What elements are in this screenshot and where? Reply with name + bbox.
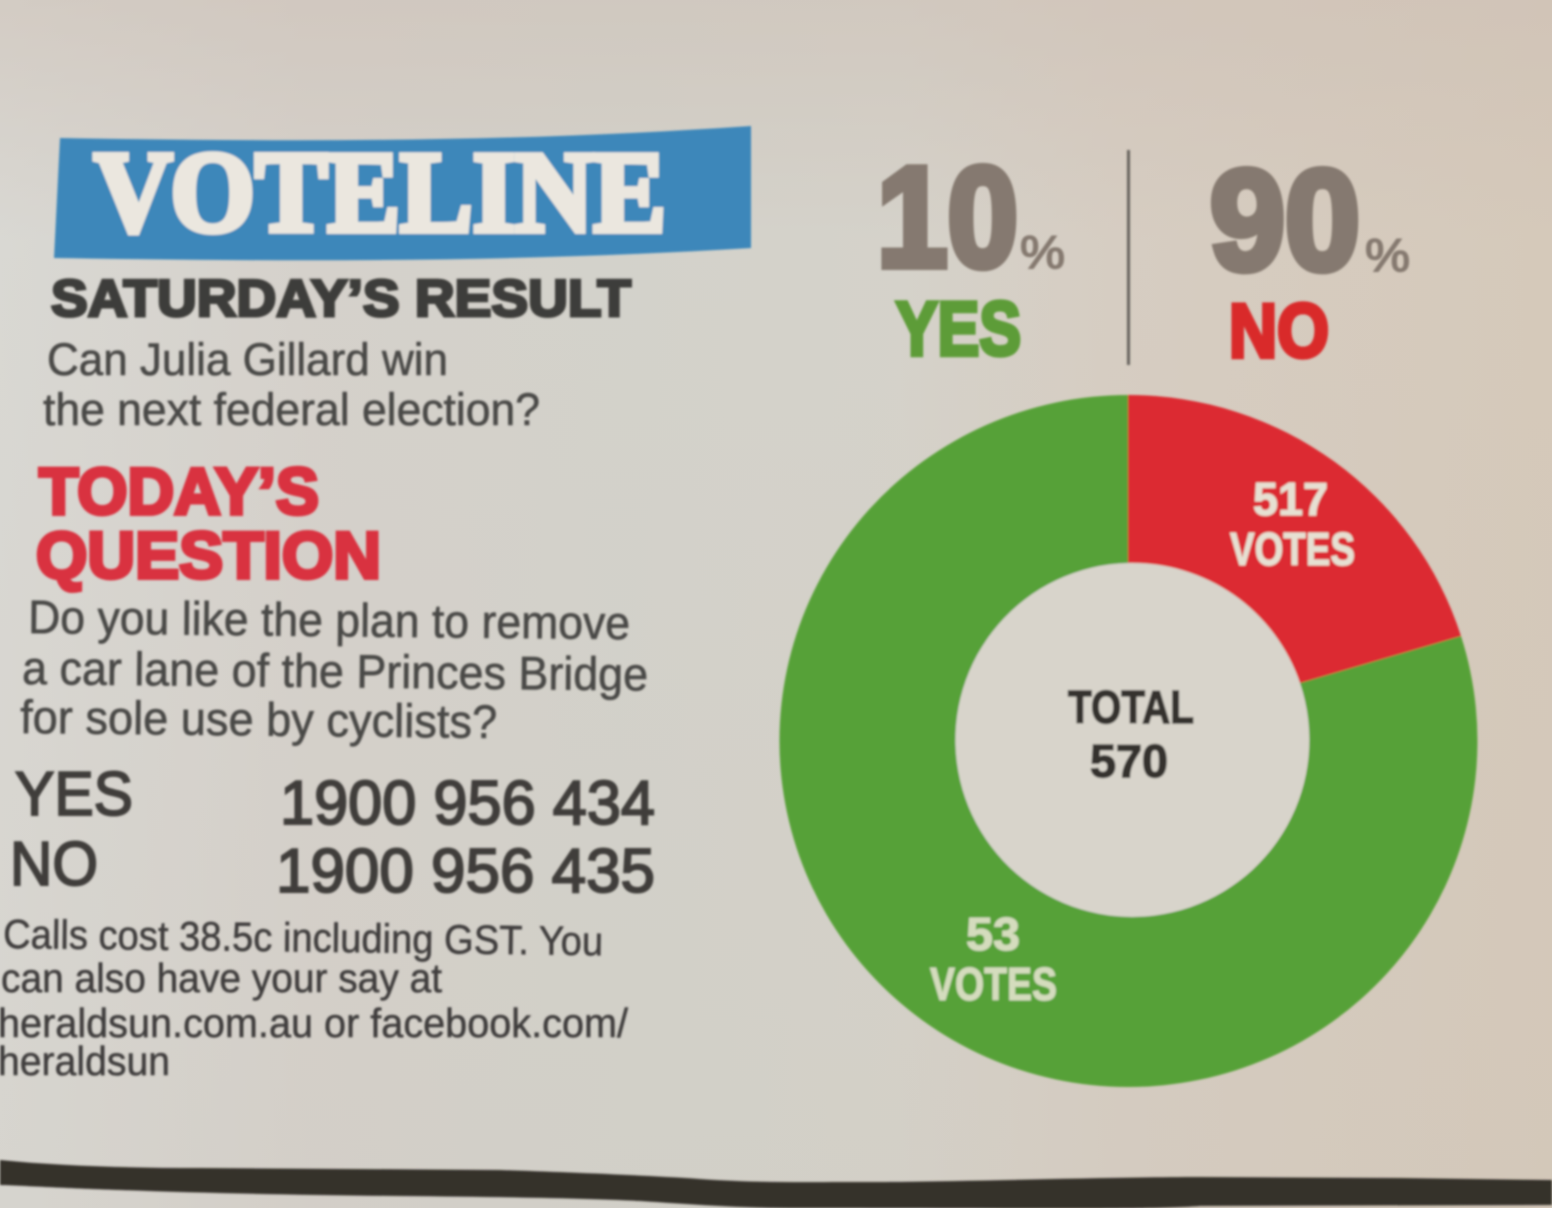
text: today's question body: Do you like the plan to remove — [28, 590, 630, 649]
result: 10 percent yes — [877, 138, 1065, 372]
result: 90 percent no: 90 — [1210, 141, 1360, 300]
text: call cost note: can also have your say at — [1, 955, 443, 1001]
donut chart — [779, 395, 1477, 1087]
vote options and phone numbers: YES — [15, 760, 133, 829]
label: 517 votes — [1230, 473, 1355, 575]
label: 53 votes — [930, 908, 1057, 1010]
panel: voteline text column — [0, 126, 751, 1084]
vote options and phone numbers: 1900 956 435 — [276, 837, 655, 906]
heading: Today's question: TODAY’S — [39, 454, 319, 528]
text: call cost note: heraldsun.com.au or facebook.com/ — [0, 1000, 629, 1046]
label: 517 votes: VOTES — [1230, 523, 1355, 575]
text: call cost note — [0, 911, 629, 1084]
label: 53 votes: VOTES — [930, 958, 1057, 1010]
donut hole — [953, 561, 1309, 917]
result: 10 percent yes: YES — [896, 287, 1021, 372]
vote options and phone numbers: NO — [10, 830, 98, 899]
segment: no 517 votes — [1128, 395, 1461, 683]
divider — [1127, 150, 1130, 365]
result: 90 percent no: % — [1365, 229, 1410, 281]
label: 517 votes: 517 — [1253, 473, 1328, 525]
label: total 570 — [1068, 681, 1194, 787]
text: call cost note: Calls cost 38.5c including GST. You — [3, 911, 603, 964]
text: Saturday's question — [43, 334, 540, 435]
bottom rule — [0, 1160, 1552, 1208]
vote options and phone numbers — [10, 760, 655, 906]
panel: results — [779, 138, 1477, 1087]
heading: Saturday's result: SATURDAY’S RESULT — [51, 270, 631, 328]
text: today's question body — [20, 590, 648, 748]
text: Saturday's question: Can Julia Gillard win — [47, 334, 448, 385]
result: 10 percent yes: % — [1020, 226, 1065, 278]
label: total 570: 570 — [1090, 735, 1168, 787]
heading: Today's question: QUESTION — [36, 518, 381, 592]
title banner: VOTELINE: VOTELINE — [94, 129, 666, 257]
text: Saturday's question: the next federal election? — [43, 384, 540, 435]
result: 90 percent no — [1210, 141, 1410, 374]
heading: Today's question — [36, 454, 381, 592]
text: today's question body: for sole use by cyclists? — [20, 690, 497, 748]
vote options and phone numbers: 1900 956 434 — [280, 769, 655, 838]
label: 53 votes: 53 — [966, 908, 1020, 960]
label: total 570: TOTAL — [1068, 681, 1194, 733]
text: call cost note: heraldsun — [0, 1038, 170, 1084]
text: today's question body: a car lane of the Princes Bridge — [22, 641, 648, 701]
result: 90 percent no: NO — [1229, 289, 1329, 374]
segment: yes 53 votes — [779, 395, 1477, 1087]
result: 10 percent yes: 10 — [877, 138, 1018, 297]
